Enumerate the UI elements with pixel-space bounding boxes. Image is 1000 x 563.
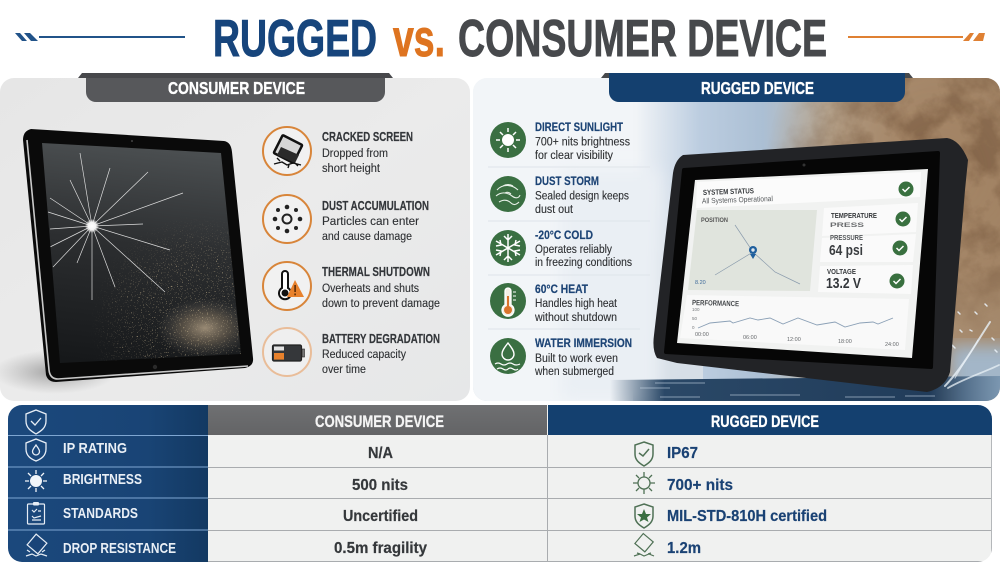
comparison table — [8, 405, 992, 563]
row label: drop resistance — [26, 534, 176, 557]
text: thermal shutdown: Overheats and shuts — [322, 281, 419, 295]
tablet screen dashboard: PERFORMANCE — [692, 298, 739, 308]
tablet screen dashboard: 13.2 V — [826, 275, 861, 292]
cracked consumer tablet — [23, 129, 253, 382]
text: battery degradation: over time — [322, 362, 366, 376]
text: cold — [535, 228, 632, 269]
icon: water drop — [490, 338, 526, 374]
tablet screen dashboard: PRESS — [830, 222, 865, 229]
title: RUGGED — [213, 10, 377, 68]
text: battery degradation — [322, 331, 440, 376]
icon: battery degradation — [263, 328, 311, 376]
text: heat: without shutdown — [534, 310, 617, 324]
column: rugged device: 700+ nits — [667, 477, 733, 494]
row label: brightness: BRIGHTNESS — [63, 471, 142, 488]
text: thermal shutdown: down to prevent damage — [322, 296, 440, 310]
tablet screen dashboard: SYSTEM STATUS — [703, 186, 754, 197]
map: 8.20 — [695, 280, 706, 286]
performance line chart: 12:00 — [787, 337, 801, 343]
icon: IP67 shield — [635, 442, 653, 466]
title ornament: right — [848, 33, 985, 41]
row label: brightness — [25, 470, 142, 492]
tablet screen dashboard: 64 psi — [829, 242, 863, 259]
icon: table header shield — [26, 410, 46, 434]
header: rugged device: RUGGED DEVICE — [701, 78, 814, 98]
text: direct sunlight: for clear visibility — [535, 148, 614, 162]
column: rugged device — [633, 412, 827, 557]
performance line chart: 100 — [692, 307, 700, 312]
header: consumer device — [78, 73, 393, 102]
text: direct sunlight: 700+ nits brightness — [535, 134, 630, 148]
text: dust storm: DUST STORM — [535, 174, 599, 188]
icon: thermal shutdown — [263, 262, 311, 310]
column: consumer device: CONSUMER DEVICE — [315, 412, 444, 431]
column: consumer device: Uncertified — [343, 508, 418, 525]
tablet shadow — [0, 350, 117, 394]
column: consumer device: N/A — [368, 445, 393, 462]
title ornament: left — [15, 33, 185, 41]
header: rugged device — [601, 73, 913, 102]
row label: IP rating: IP RATING — [63, 440, 127, 457]
performance line chart: 06:00 — [743, 335, 757, 341]
text: cracked screen: Dropped from — [322, 146, 388, 160]
text: water immersion — [534, 336, 632, 378]
text: water immersion: when submerged — [534, 364, 614, 378]
icon: direct sunlight — [490, 122, 526, 158]
text: cracked screen: short height — [322, 161, 381, 175]
title: vs. — [393, 10, 445, 68]
text: heat: Handles high heat — [535, 296, 618, 310]
column: rugged device: MIL-STD-810H certified — [667, 508, 827, 525]
text: dust accumulation — [322, 198, 429, 243]
row label: standards — [28, 502, 138, 524]
text: cold: in freezing conditions — [535, 255, 632, 269]
text: dust storm: dust out — [535, 202, 574, 216]
text: direct sunlight: DIRECT SUNLIGHT — [535, 120, 623, 134]
icon: sun outline — [633, 472, 655, 494]
text: battery degradation: BATTERY DEGRADATION — [322, 331, 440, 346]
map — [688, 210, 817, 291]
column: consumer device — [315, 412, 444, 557]
column: rugged device: IP67 — [667, 445, 698, 462]
text: thermal shutdown: THERMAL SHUTDOWN — [322, 264, 430, 279]
icon: cracked screen — [263, 127, 311, 175]
row label: drop resistance: DROP RESISTANCE — [63, 540, 176, 557]
icon: dust storm — [490, 176, 526, 212]
icon: thermometer — [490, 283, 526, 319]
text: dust accumulation: DUST ACCUMULATION — [322, 198, 429, 213]
tablet screen dashboard: All Systems Operational — [702, 194, 773, 205]
title — [213, 10, 827, 68]
scene background: sky, dust and water — [473, 78, 1000, 415]
performance line chart: 00:00 — [695, 332, 709, 338]
tablet screen dashboard: VOLTAGE — [827, 267, 856, 276]
text: dust storm — [535, 174, 629, 216]
performance line chart: 24:00 — [885, 342, 899, 348]
status check icons — [890, 182, 914, 288]
header: consumer device: CONSUMER DEVICE — [168, 78, 305, 98]
icon: dust accumulation — [263, 195, 311, 243]
panel: rugged device — [473, 73, 1000, 415]
column: consumer device: 0.5m fragility — [334, 540, 427, 557]
column: rugged device: RUGGED DEVICE — [711, 412, 819, 431]
text: thermal shutdown — [322, 264, 440, 310]
text: cracked screen — [322, 129, 413, 175]
row label: IP rating — [26, 439, 127, 461]
text: battery degradation: Reduced capacity — [322, 347, 407, 361]
performance line chart: 50 — [692, 316, 698, 321]
text: dust accumulation: and cause damage — [322, 229, 412, 243]
performance line chart — [692, 307, 899, 348]
text: direct sunlight — [535, 120, 630, 162]
text: dust accumulation: Particles can enter — [322, 214, 419, 228]
text: cracked screen: CRACKED SCREEN — [322, 129, 413, 144]
title: CONSUMER DEVICE — [458, 10, 827, 68]
panel: consumer device — [0, 73, 470, 401]
tablet screen dashboard: PRESSURE — [830, 235, 863, 242]
column: consumer device: 500 nits — [352, 477, 408, 494]
text: heat: 60°C HEAT — [535, 282, 588, 296]
icon: drop outline — [634, 534, 654, 556]
faint feature dividers — [488, 167, 650, 329]
icon: snowflake — [490, 230, 526, 266]
tablet screen dashboard — [677, 169, 928, 358]
performance line chart: 0 — [692, 325, 695, 330]
icon: star shield — [635, 504, 653, 528]
row label: standards: STANDARDS — [63, 505, 138, 522]
rugged tablet — [653, 138, 968, 392]
text: cold: -20°C COLD — [535, 228, 593, 242]
tablet screen dashboard: TEMPERATURE — [831, 211, 877, 220]
text: water immersion: Built to work even — [535, 351, 618, 365]
column: rugged device: 1.2m — [667, 540, 701, 557]
performance line chart: 18:00 — [838, 339, 852, 345]
text: heat — [534, 282, 618, 324]
text: water immersion: WATER IMMERSION — [535, 336, 632, 350]
text: dust storm: Sealed design keeps — [535, 188, 629, 202]
map: POSITION — [701, 217, 728, 224]
text: cold: Operates reliably — [535, 242, 613, 256]
